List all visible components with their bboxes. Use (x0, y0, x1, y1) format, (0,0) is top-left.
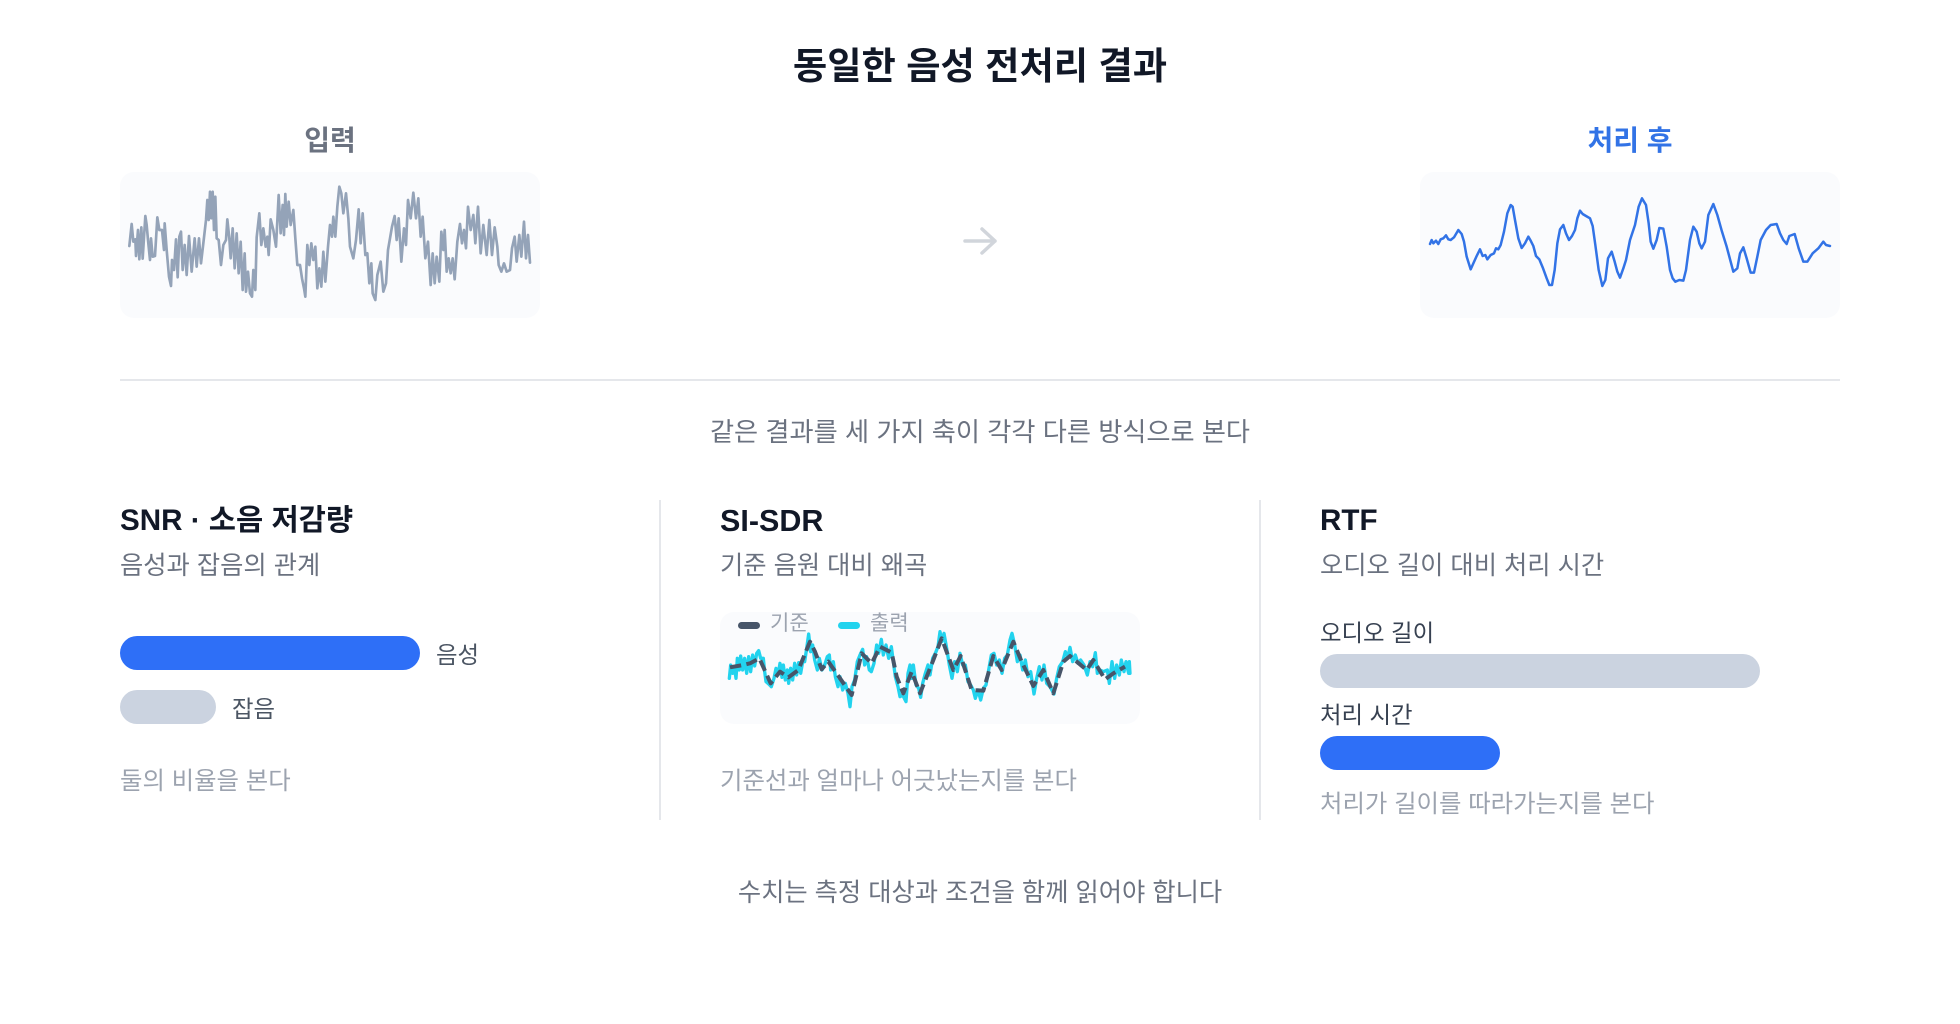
subtitle: 같은 결과를 세 가지 축이 각각 다른 방식으로 본다 (710, 417, 1250, 447)
waveform box: processed (1420, 172, 1840, 318)
footer note: 수치는 측정 대상과 조건을 함께 읽어야 합니다 (738, 879, 1222, 907)
arrow (963, 227, 997, 255)
chart: noisy input waveform (128, 185, 532, 302)
panel: input waveform (304, 125, 356, 156)
legend swatch: reference (738, 622, 760, 629)
description: SI-SDR: 기준 음원 대비 왜곡 (720, 552, 927, 580)
heading: input: 입력 (304, 125, 356, 156)
legend label: reference: 기준 (770, 612, 809, 635)
chart: clean processed waveform (1428, 197, 1832, 288)
panel: SNR (120, 504, 479, 795)
bar: speech (120, 636, 420, 670)
chart box: SI-SDR (720, 612, 1140, 724)
label: noise: 잡음 (232, 696, 275, 722)
legend swatch: output (838, 622, 860, 629)
panel: SI-SDR (720, 504, 1077, 795)
divider (120, 379, 1840, 381)
note: SNR: 둘의 비율을 본다 (120, 768, 291, 795)
note: SI-SDR: 기준선과 얼마나 어긋났는지를 본다 (720, 768, 1077, 795)
heading: SNR: SNR · 소음 저감량 (120, 504, 353, 537)
heading: RTF: RTF (1320, 504, 1378, 537)
panel: RTF (1320, 504, 1760, 818)
bar: processing time (1320, 736, 1500, 770)
label: audio length: 오디오 길이 (1320, 620, 1434, 646)
heading: processed: 처리 후 (1587, 125, 1673, 156)
waveform box: input (120, 172, 540, 318)
chart: reference and output waveforms (728, 630, 1132, 708)
description: RTF: 오디오 길이 대비 처리 시간 (1320, 552, 1604, 580)
legend label: output: 출력 (870, 612, 909, 635)
heading: SI-SDR: SI-SDR (720, 504, 823, 538)
divider: column 1 (659, 500, 661, 820)
label: speech: 음성 (436, 642, 479, 668)
divider: column 2 (1259, 500, 1261, 820)
bar: audio length (1320, 654, 1760, 688)
label: processing time: 처리 시간 (1320, 702, 1413, 728)
bar: noise (120, 690, 216, 724)
note: RTF: 처리가 길이를 따라가는지를 본다 (1320, 791, 1654, 818)
description: SNR: 음성과 잡음의 관계 (120, 552, 320, 580)
panel: processed waveform (1587, 125, 1673, 156)
title: 동일한 음성 전처리 결과 (793, 45, 1167, 87)
